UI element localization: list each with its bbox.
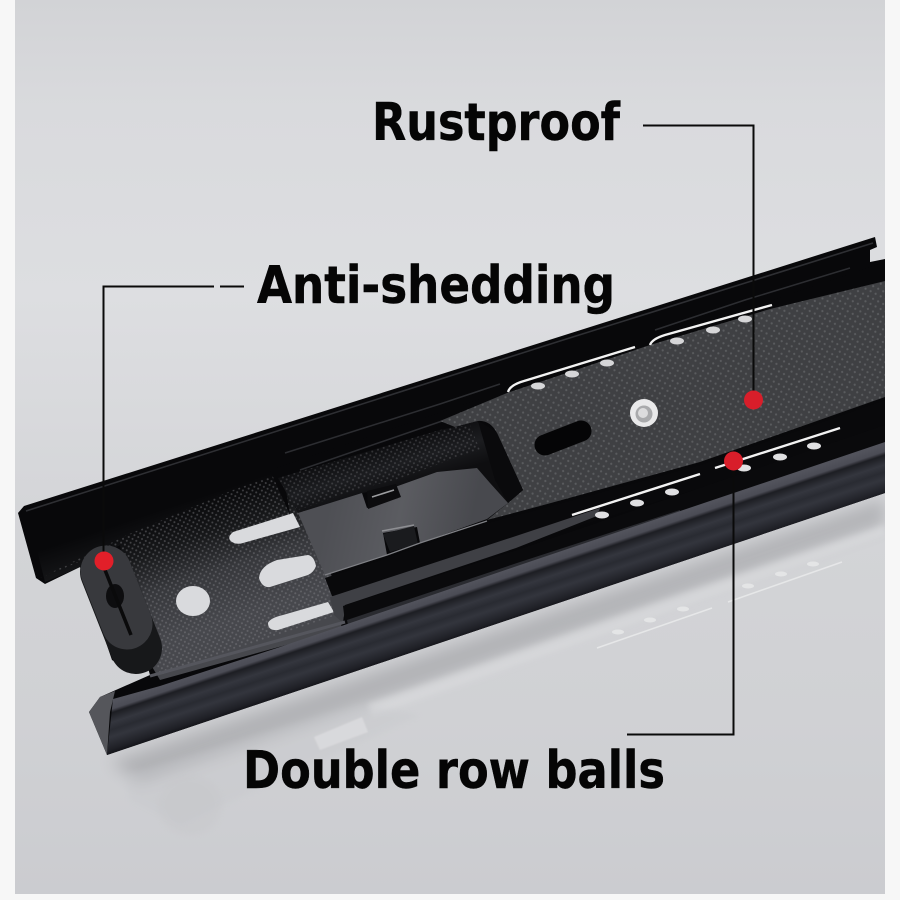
- marker: Anti-shedding: [94, 552, 114, 570]
- inner plate: [298, 468, 508, 575]
- tube lower strip: [347, 510, 680, 630]
- top lip highlight: [26, 243, 873, 511]
- lower ball row: [572, 428, 840, 518]
- plastic bumper: [105, 570, 136, 648]
- centre plate: [440, 281, 885, 520]
- edge highlight of inner plate: [325, 521, 487, 575]
- tube top strip: [330, 508, 600, 623]
- left plate dot texture: [40, 470, 345, 675]
- tab upper: [367, 484, 401, 509]
- upper black channel: [270, 262, 885, 515]
- drawer slide: [18, 237, 885, 755]
- marker: Rustproof: [744, 390, 763, 410]
- leader line: Rustproof: [643, 126, 754, 400]
- heading: Rustproof: Rustproof: [372, 93, 621, 153]
- upper ball row: [508, 305, 772, 392]
- rivet: [630, 399, 658, 427]
- leader line: Double row balls: [627, 461, 734, 734]
- gap under inner plate: [325, 400, 885, 600]
- dark glints on upper channel: [285, 268, 850, 470]
- rail flange highlight: [150, 622, 345, 676]
- tube dark: [343, 425, 885, 622]
- dotted inner strip: [278, 421, 523, 513]
- rail end cap: [89, 691, 115, 755]
- heading: Anti-shedding: Anti-shedding: [257, 256, 615, 316]
- rail reflection on the surface: [114, 497, 885, 785]
- mounting slots: [176, 513, 334, 630]
- marker: Double row balls: [724, 452, 743, 470]
- oval hole: [545, 431, 581, 445]
- bottom rail: [107, 442, 885, 755]
- tab lower: [383, 526, 418, 552]
- left plate: [32, 450, 345, 680]
- heading: Double row balls: Double row balls: [243, 741, 665, 801]
- rail silhouette: [18, 237, 885, 755]
- leader line: Anti-shedding: [104, 286, 244, 561]
- centre plate dot texture: [440, 281, 885, 520]
